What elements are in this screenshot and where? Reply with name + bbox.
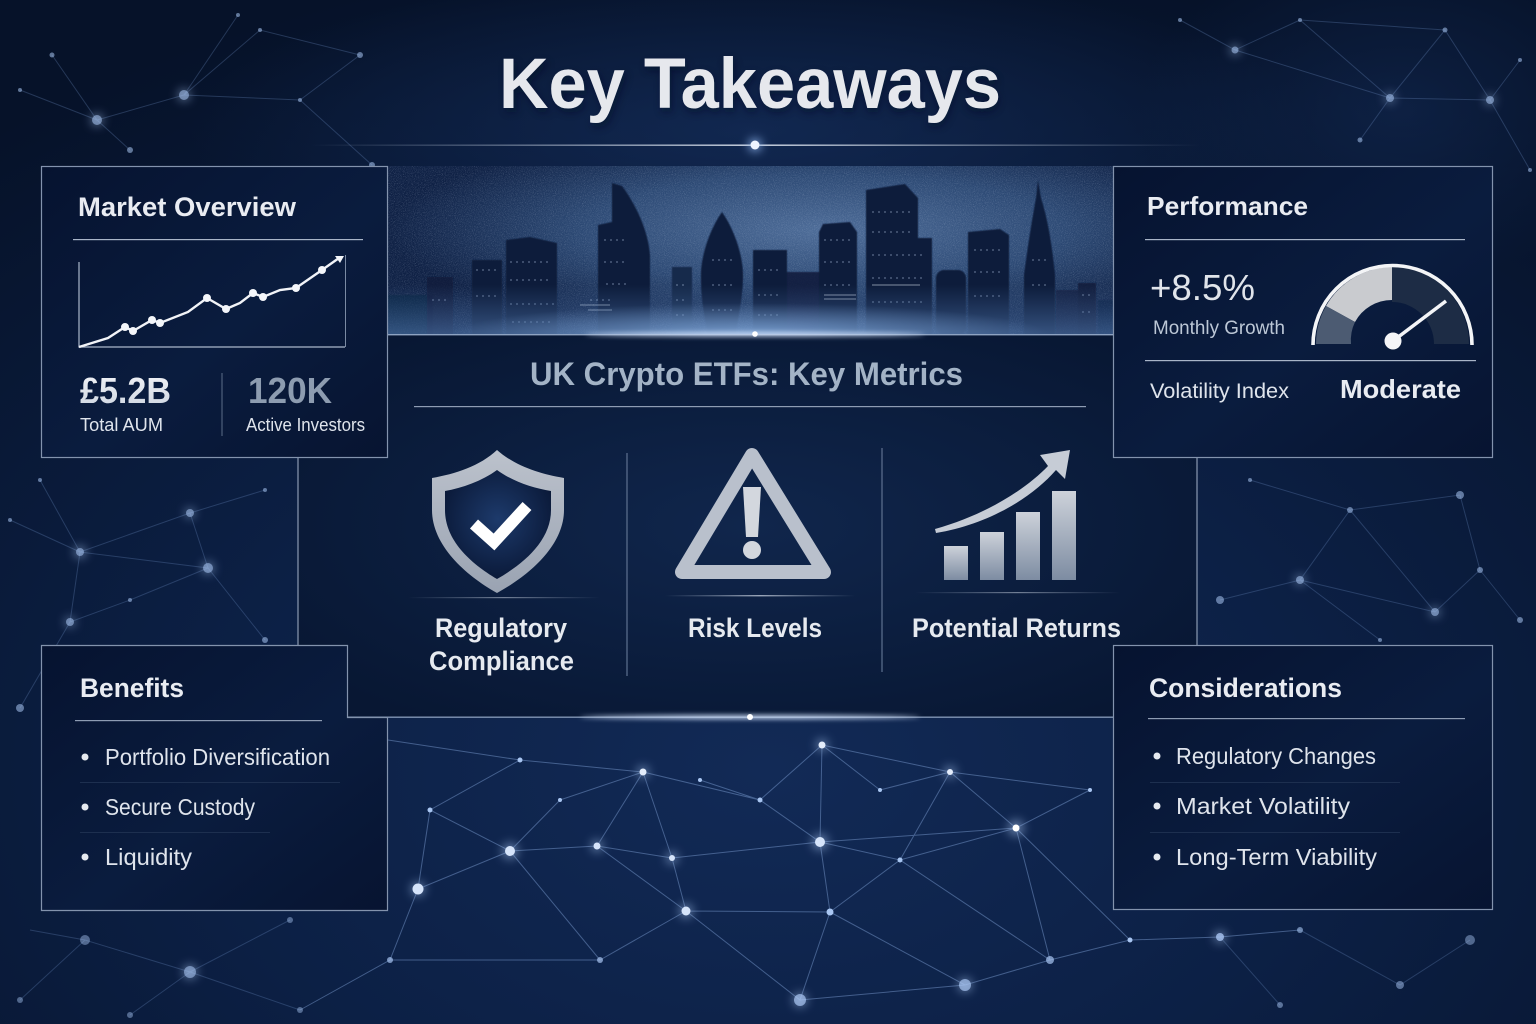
- list: considerations: Market Volatility: [1176, 793, 1351, 819]
- list: benefits: [80, 744, 340, 870]
- panel: performance: [1114, 166, 1492, 458]
- icon: shield with check: [432, 450, 564, 593]
- panel: considerations: [1114, 646, 1492, 910]
- stat: total AUM: [80, 370, 171, 435]
- list: benefits: Portfolio Diversification: [105, 744, 330, 770]
- bottom glow line: [348, 714, 1113, 720]
- list: considerations: Regulatory Changes: [1176, 743, 1376, 769]
- stat: active investors: Active Investors: [246, 415, 365, 435]
- label: regulatory compliance: Regulatory: [435, 613, 567, 643]
- panel: market overview: [42, 166, 388, 458]
- network pattern: central connections: [300, 740, 1300, 1010]
- icon: warning triangle: [682, 455, 824, 572]
- stat: monthly growth: Monthly Growth: [1153, 318, 1285, 339]
- line chart: AUM growth: [79, 255, 346, 347]
- list: considerations: [1150, 743, 1400, 870]
- title divider with glowing dot: [310, 139, 1200, 151]
- heading: benefits: Benefits: [80, 673, 184, 703]
- text: volatility index: Volatility Index: [1150, 380, 1290, 403]
- title: Key Takeaways: [502, 49, 1001, 128]
- text: moderate: Moderate: [1340, 374, 1461, 404]
- list: benefits: Liquidity: [105, 844, 193, 870]
- icon: rising bars with arrow: [935, 450, 1076, 580]
- heading: considerations: Considerations: [1149, 673, 1342, 703]
- stat: active investors: 120K: [248, 370, 332, 411]
- stat: monthly growth: +8.5%: [1150, 267, 1255, 308]
- stat: total AUM: Total AUM: [80, 415, 163, 435]
- subtitle divider: [414, 406, 1086, 407]
- panel: central metrics backdrop: [298, 335, 1197, 717]
- label: regulatory compliance: [429, 613, 574, 676]
- metric column dividers: [627, 448, 882, 676]
- heading: market overview: Market Overview: [78, 192, 297, 222]
- skyline image strip: [388, 166, 1113, 334]
- skyline base line with glow: [388, 331, 1113, 337]
- list: considerations: Long-Term Viability: [1176, 844, 1378, 870]
- label: potential returns: Potential Returns: [912, 613, 1121, 643]
- stat: active investors: [246, 370, 365, 435]
- stat: monthly growth: [1150, 267, 1285, 339]
- heading: key metrics: UK Crypto ETFs: Key Metrics: [530, 356, 963, 392]
- label: risk levels: Risk Levels: [688, 613, 822, 643]
- metric label underlines: [408, 592, 1120, 598]
- stat: total AUM: £5.2B: [80, 370, 171, 411]
- list: benefits: Secure Custody: [105, 794, 255, 820]
- heading: performance: Performance: [1147, 191, 1308, 221]
- panel: benefits: [42, 646, 388, 910]
- title: Key Takeaways: [499, 45, 1001, 124]
- label: regulatory compliance: Compliance: [429, 646, 574, 676]
- gauge: volatility: [1313, 266, 1472, 350]
